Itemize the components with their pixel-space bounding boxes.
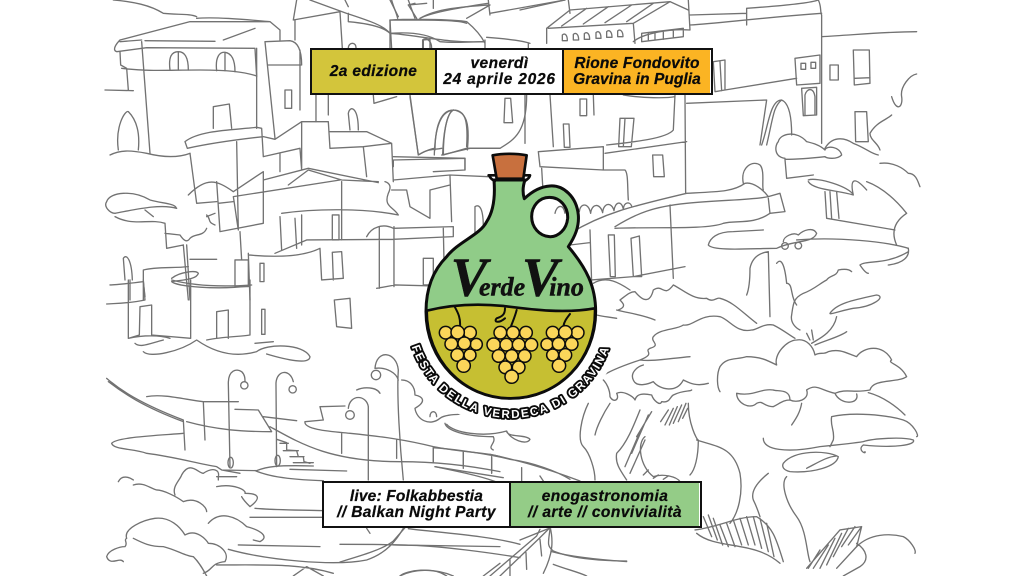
cell: date — [435, 50, 562, 93]
street lamps, stairs and lower left — [107, 280, 500, 576]
cell: themes — [509, 483, 699, 526]
bottle lip — [489, 175, 530, 181]
info bar bottom — [322, 481, 702, 528]
large tree lower right — [520, 248, 917, 576]
bottle body — [426, 180, 596, 398]
cell: live music — [324, 483, 509, 526]
top centre houses — [390, 0, 565, 170]
tagline on curve — [412, 347, 610, 418]
grape cluster right — [541, 326, 584, 372]
grape stems — [455, 307, 570, 327]
logo: VerdeVino bottle: FESTA DELLA VERDECA DI GRAVINA — [410, 342, 611, 420]
houses upper right — [520, 0, 920, 283]
cell: date: venerdì — [471, 54, 528, 72]
cell: edition: 2a edizione — [330, 62, 417, 80]
cell: date: 24 aprile 2026 — [443, 70, 556, 88]
grape cluster left — [439, 326, 482, 372]
white halo behind the curved tagline — [412, 347, 610, 418]
info bar top — [310, 48, 713, 95]
houses upper left — [105, 0, 500, 300]
grape cluster centre — [487, 326, 538, 383]
cell: live music: // Balkan Night Party — [337, 504, 496, 520]
wine level — [427, 305, 595, 398]
cork — [493, 154, 527, 179]
cell: edition — [312, 50, 435, 93]
logotype: VerdeVino — [451, 246, 584, 307]
cell: location — [562, 50, 710, 93]
cell: location: Gravina in Puglia — [573, 70, 701, 88]
cell: themes: // arte // convivialità — [528, 504, 682, 520]
cell: live music: live: Folkabbestia — [350, 488, 483, 504]
cell: location: Rione Fondovito — [574, 54, 700, 72]
cell: themes: enogastronomia — [542, 488, 668, 504]
road and wall bottom centre — [340, 424, 627, 576]
